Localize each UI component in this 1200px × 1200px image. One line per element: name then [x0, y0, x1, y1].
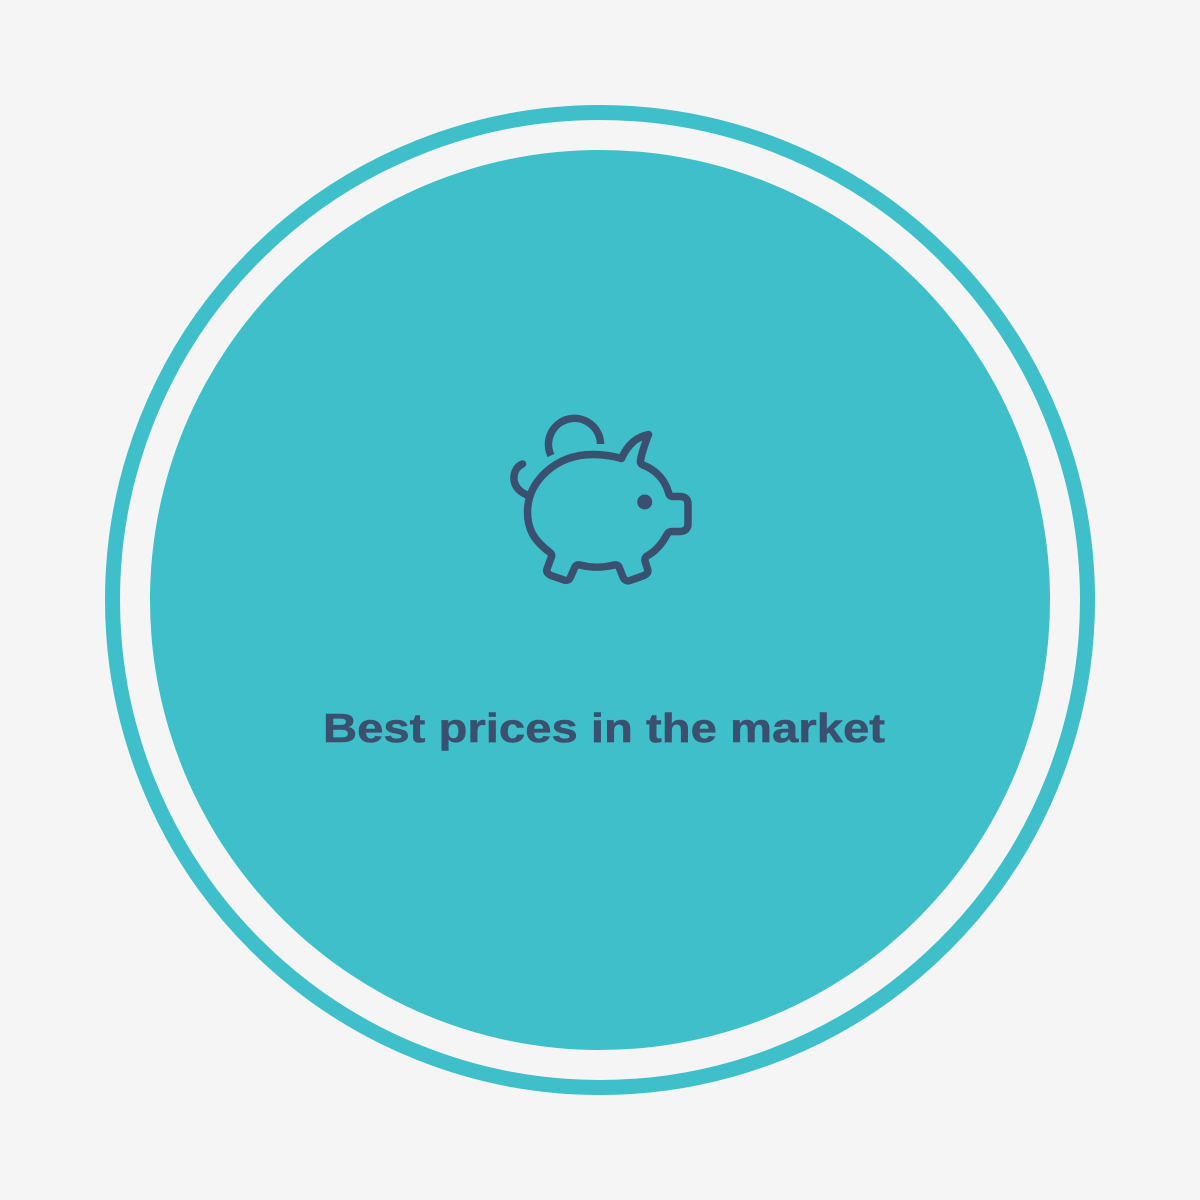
coin [549, 418, 600, 456]
icon: pig eye [637, 494, 652, 510]
inner filled circle [150, 150, 1050, 1050]
pig body [528, 434, 688, 581]
outer ring [112, 112, 1088, 1088]
pig tail [514, 464, 527, 495]
heading: Best prices in the market [323, 705, 885, 751]
icon: piggy bank with coin [514, 418, 688, 581]
